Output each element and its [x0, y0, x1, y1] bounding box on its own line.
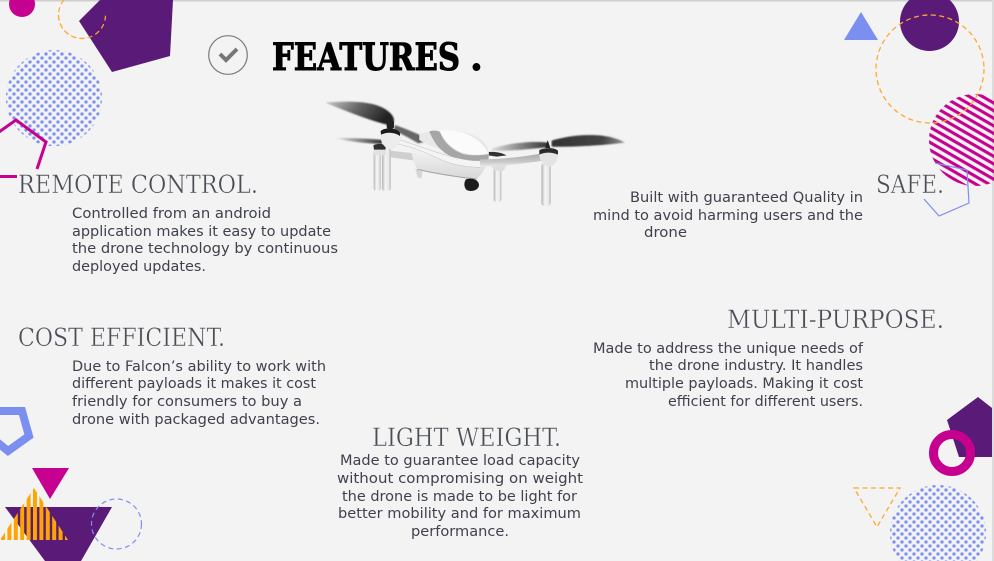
camera [464, 179, 479, 191]
text block: cost efficient: friendly for consumers to buy a [72, 394, 302, 410]
canopy window [439, 130, 488, 155]
heading: cost efficient: COST EFFICIENT. [18, 323, 225, 352]
text block: multi-purpose [593, 341, 864, 410]
text block: remote control: application makes it easy to update [72, 224, 331, 240]
feature: safe [593, 170, 944, 241]
heading: multi-purpose: MULTI-PURPOSE. [727, 305, 944, 334]
feature: multi-purpose [593, 305, 944, 410]
text block: light weight: better mobility and for maximum [338, 506, 581, 522]
text block: remote control: Controlled from an android [72, 206, 271, 222]
drone image [325, 102, 625, 206]
front-left blade [325, 102, 394, 125]
left front motor hub [380, 129, 401, 149]
back-left blade [337, 138, 383, 144]
text block: safe: mind to avoid harming users and the [593, 208, 863, 224]
text block: multi-purpose: efficient for different users. [668, 394, 863, 410]
title: . [470, 35, 483, 79]
text block: safe: Built with guaranteed Quality in [630, 190, 863, 206]
text block: multi-purpose: Made to address the unique needs of [593, 341, 864, 357]
canopy [419, 130, 489, 158]
decor: top-right shapes [844, 0, 994, 216]
feature: light weight [337, 423, 584, 540]
canopy grey band [429, 131, 489, 162]
text block: safe [593, 190, 863, 241]
text block: remote control: the drone technology by continuous [72, 241, 338, 257]
text block: light weight: Made to guarantee load capacity [340, 453, 580, 469]
text block: remote control: deployed updates. [72, 259, 206, 275]
arms [397, 139, 483, 167]
right blade [492, 142, 548, 151]
text block: cost efficient: drone with packaged advantages. [72, 412, 320, 428]
text block: remote control [72, 206, 338, 275]
text block: safe: drone [644, 225, 687, 241]
decor: bottom-left shapes [0, 411, 142, 561]
text block: cost efficient [72, 359, 326, 428]
text block: cost efficient: different payloads it makes it cost [72, 376, 317, 392]
text block: cost efficient: Due to Falcon’s ability to work with [72, 359, 326, 375]
heading: remote control: REMOTE CONTROL. [18, 170, 258, 199]
text block: multi-purpose: multiple payloads. Making it cost [625, 376, 864, 392]
decor: top-left shapes [0, 0, 173, 178]
belly [411, 147, 487, 179]
icon: check mark in circle [209, 36, 247, 74]
text block: light weight: without compromising on weight [337, 471, 584, 487]
feature: cost efficient [18, 323, 326, 428]
rear hub and arm [373, 145, 386, 155]
feature: remote control [18, 170, 338, 275]
rear legs [374, 150, 381, 191]
right motor hub [539, 149, 558, 167]
text block: multi-purpose: the drone industry. It handles [649, 358, 863, 374]
decor: bottom-right shapes [854, 397, 992, 561]
heading: safe: SAFE. [876, 170, 944, 199]
title: FEATURES [272, 35, 460, 79]
text block: light weight [337, 453, 584, 540]
text block: light weight: performance. [411, 524, 509, 540]
heading: light weight: LIGHT WEIGHT. [372, 423, 561, 452]
text block: light weight: the drone is made to be light for [342, 489, 577, 505]
